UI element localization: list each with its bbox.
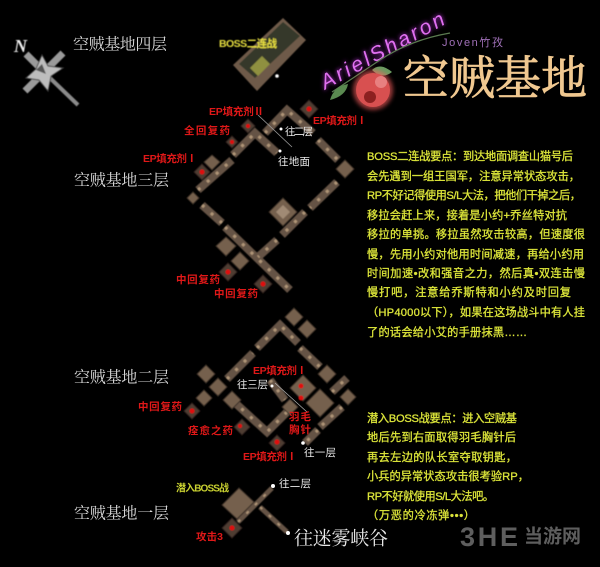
rooms floor 3 bbox=[187, 155, 354, 270]
text block: infiltration boss notes: 潜入BOSS战要点：进入空贼基 bbox=[367, 411, 517, 425]
map: floor 2 bbox=[184, 308, 356, 451]
items floor 2 bbox=[190, 408, 194, 414]
corridors floor 1 bbox=[238, 488, 287, 532]
labels floor 3: EP填充剂Ⅱ bbox=[209, 105, 264, 118]
labels floor 1 bbox=[176, 477, 388, 550]
map: floor 4 boss room bbox=[219, 18, 306, 91]
title: floor 3: 空贼基地三层 bbox=[74, 170, 169, 190]
labels floor 1: 往迷雾峡谷 bbox=[294, 528, 388, 550]
text block: infiltration boss notes bbox=[367, 411, 529, 522]
rose stem bbox=[332, 33, 450, 92]
text block: boss battle notes: （HP4000以下），如果在这场战斗中有人挂 bbox=[367, 305, 585, 319]
rose flower bbox=[353, 70, 393, 110]
text block: infiltration boss notes: 再去左边的队长室夺取钥匙， bbox=[367, 450, 517, 464]
map: floor 1 bbox=[222, 488, 287, 538]
corridors floor 2 bbox=[227, 325, 347, 443]
leader line floor 2 bbox=[275, 383, 307, 412]
rooms floor 2 bbox=[196, 308, 356, 417]
label: boss double battle: BOSS二连战 bbox=[219, 37, 278, 50]
labels floor 2 bbox=[138, 364, 336, 463]
text block: boss battle notes: 移拉的单挑。移拉虽然攻击较高，但速度很 bbox=[367, 227, 585, 241]
labels floor 3: EP填充剂Ⅰ bbox=[313, 114, 367, 127]
watermark bbox=[460, 522, 581, 552]
labels floor 2: 痊愈之药 bbox=[188, 424, 233, 437]
watermark: 3HE bbox=[460, 522, 518, 552]
logo: ArielSharon rose and calligraphy bbox=[315, 8, 587, 110]
labels floor 3: 往二层 bbox=[285, 125, 313, 138]
labels floor 2: 中回复药 bbox=[138, 400, 182, 413]
text block: boss battle notes: 时间加速•改和强音之力，然后真•双连击慢 bbox=[367, 266, 585, 280]
logo name glow: ArielSharon bbox=[315, 8, 449, 95]
labels floor 3: 中回复药 bbox=[214, 287, 258, 300]
rooms floor 1 bbox=[222, 488, 254, 519]
leader line floor 3 bbox=[258, 115, 292, 147]
labels floor 1: 攻击3 bbox=[196, 530, 223, 543]
logo subtitle: Joven竹孜 bbox=[442, 35, 503, 49]
labels floor 3: 全回复药 bbox=[184, 124, 230, 137]
corridors floor 3 bbox=[198, 110, 338, 290]
title: floor 4: 空贼基地四层 bbox=[73, 34, 167, 54]
items floor 3 bbox=[200, 170, 204, 174]
text block: infiltration boss notes: （万恶的冷冻弹•••） bbox=[367, 508, 475, 522]
labels floor 3 bbox=[143, 105, 367, 300]
labels floor 2: 往三层 bbox=[237, 378, 268, 391]
title: floor 1: 空贼基地一层 bbox=[74, 504, 169, 522]
text block: boss battle notes: 慢打吧，注意给乔斯特和小约及时回复 bbox=[367, 285, 571, 299]
text block: infiltration boss notes: 地后先到右面取得羽毛胸针后 bbox=[367, 430, 516, 444]
labels floor 2: EP填充剂Ⅰ bbox=[243, 450, 297, 463]
labels floor 3: EP填充剂Ⅰ bbox=[143, 152, 197, 165]
text block: boss battle notes: 了的话会给小艾的手册抹黑…… bbox=[367, 325, 527, 339]
text block: boss battle notes: RP不好记得使用S/L大法，把他们干掉之后， bbox=[367, 188, 581, 202]
title: floor 2: 空贼基地二层 bbox=[74, 368, 169, 386]
rose leaves bbox=[330, 84, 348, 100]
labels floor 1: 往二层 bbox=[279, 477, 311, 490]
labels floor 3: 往地面 bbox=[278, 155, 310, 168]
labels floor 2: 往一层 bbox=[304, 446, 336, 459]
text block: boss battle notes: 会先遇到一组王国军，注意异常状态攻击， bbox=[367, 169, 580, 183]
icon: compass cross: N bbox=[13, 36, 28, 56]
labels floor 2: EP填充剂Ⅰ bbox=[253, 364, 307, 377]
rose leaf top bbox=[372, 66, 392, 76]
labels floor 3: 中回复药 bbox=[176, 273, 220, 286]
logo calligraphy title: 空贼基地 bbox=[403, 42, 587, 108]
labels floor 1: 潜入BOSS战 bbox=[176, 482, 229, 494]
text block: infiltration boss notes: 小兵的异常状态攻击很考验RP， bbox=[367, 469, 529, 483]
map: floor 3 bbox=[187, 100, 354, 293]
labels floor 2: 胸针 bbox=[289, 423, 312, 436]
text block: infiltration boss notes: RP不好就使用S/L大法吧。 bbox=[367, 489, 494, 503]
text block: boss battle notes bbox=[367, 149, 585, 339]
text block: boss battle notes: 慢，先用小约对他用时间减速，再给小约用 bbox=[367, 247, 584, 261]
labels floor 2: 羽毛 bbox=[289, 410, 312, 423]
watermark: 当游网 bbox=[524, 524, 581, 548]
logo name: ArielSharon bbox=[315, 8, 449, 95]
icon: compass cross bbox=[13, 36, 78, 105]
text block: boss battle notes: BOSS二连战要点：到达地面调查山猫号后 bbox=[367, 149, 573, 163]
text block: boss battle notes: 移拉会赶上来，接着是小约+乔丝特对抗 bbox=[367, 208, 567, 222]
